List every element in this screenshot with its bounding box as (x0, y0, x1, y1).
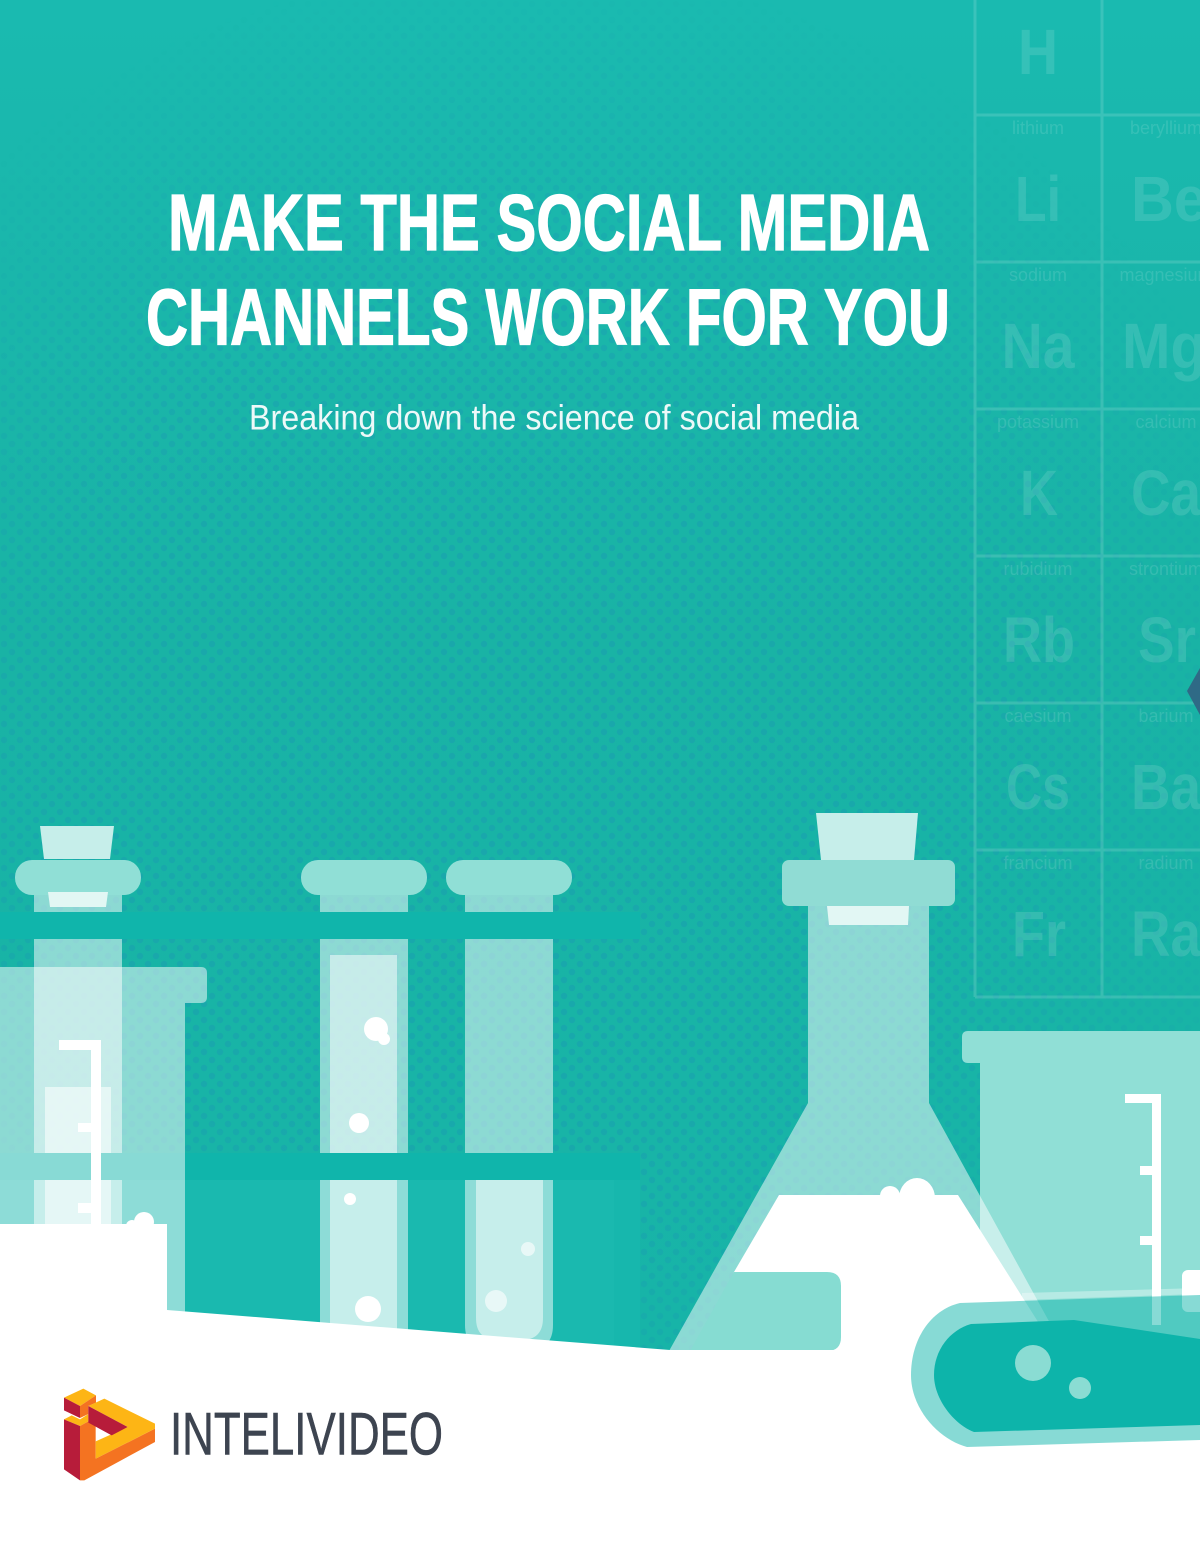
tube 2 (301, 860, 427, 1350)
lying test tube (911, 1288, 1200, 1447)
logo wordmark: INTELIVIDEO (170, 1400, 443, 1468)
Intelivideo logo (64, 1389, 443, 1480)
periodic table backdrop: barium (1138, 706, 1194, 726)
periodic table backdrop: H (1018, 16, 1058, 88)
right beaker (962, 1031, 1200, 1340)
subtitle: Breaking down the science of social media (249, 398, 859, 438)
periodic table backdrop (975, 0, 1200, 997)
periodic table backdrop: Fr (1012, 898, 1066, 970)
tube 1 (15, 826, 141, 1230)
title: MAKE THE SOCIAL MEDIA (168, 178, 930, 267)
tube 3 (446, 860, 572, 1350)
left beaker (0, 967, 207, 1330)
periodic table backdrop: Cs (1006, 751, 1070, 823)
periodic table backdrop: caesium (1004, 706, 1072, 726)
periodic table backdrop: potassium (997, 412, 1079, 432)
periodic table backdrop: calcium (1135, 412, 1197, 432)
periodic table backdrop: rubidium (1003, 559, 1073, 579)
white ground (0, 1224, 1200, 1553)
logo mark (64, 1389, 155, 1480)
flask tag (690, 1272, 841, 1351)
flask liquid (700, 1178, 1040, 1360)
periodic table backdrop: lithium (1012, 118, 1064, 138)
periodic table backdrop: radium (1138, 853, 1194, 873)
periodic table backdrop: sodium (1009, 265, 1067, 285)
title (146, 178, 950, 362)
periodic table backdrop: Rb (1003, 604, 1075, 676)
periodic table backdrop: beryllium (1130, 118, 1200, 138)
periodic table backdrop: Li (1015, 163, 1061, 235)
periodic table backdrop: francium (1003, 853, 1073, 873)
flat area behind the rack (0, 1180, 640, 1355)
dark diamond at right edge (1187, 668, 1200, 715)
periodic table backdrop: Na (1002, 310, 1075, 382)
erlenmeyer flask (669, 813, 1062, 1360)
periodic table backdrop: K (1020, 457, 1058, 529)
test tube rack and tubes (0, 826, 640, 1355)
rack bars (0, 912, 640, 939)
